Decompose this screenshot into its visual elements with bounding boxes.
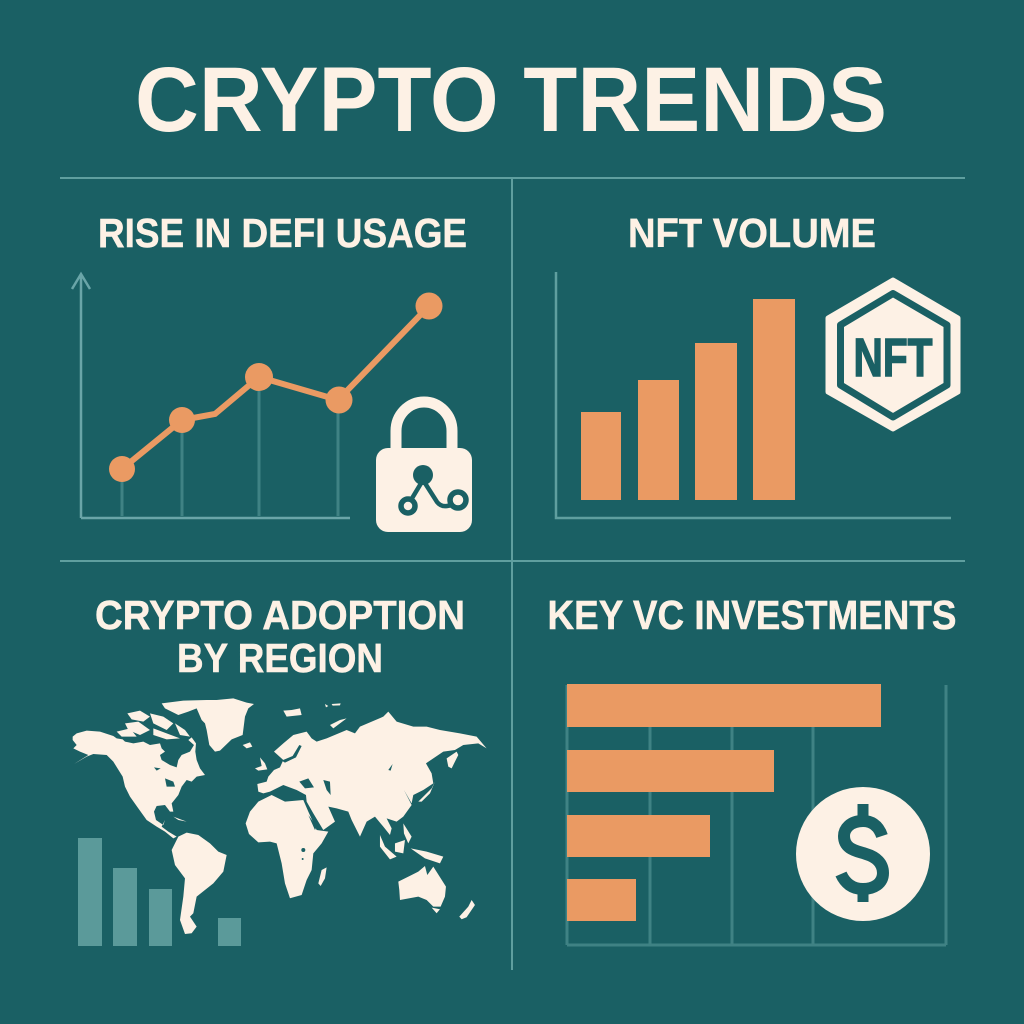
- arctic islands: [117, 711, 190, 739]
- panel: VC investments: [548, 592, 956, 945]
- Eurasia: [257, 712, 487, 837]
- horizontal bar chart: [567, 684, 946, 945]
- Africa: [246, 795, 328, 898]
- title: CRYPTO TRENDS: [135, 49, 887, 151]
- small bar chart: [78, 838, 241, 946]
- heading: NFT volume: NFT VOLUME: [628, 210, 876, 256]
- inland seas and lakes: [154, 745, 393, 860]
- heading: adoption by region: CRYPTO ADOPTION: [95, 592, 465, 638]
- panel: adoption by region: [73, 592, 487, 946]
- bar chart: [556, 272, 951, 518]
- icon: NFT hexagon: [828, 280, 958, 429]
- heading: DeFi usage: RISE IN DEFI USAGE: [98, 210, 467, 256]
- icon: blockchain padlock: [376, 402, 472, 532]
- panel: NFT volume: [556, 210, 958, 518]
- line chart: [72, 274, 442, 518]
- heading: VC investments: KEY VC INVESTMENTS: [548, 592, 956, 638]
- panel: DeFi usage: [72, 210, 472, 532]
- icon: NFT hexagon: NFT: [854, 328, 933, 388]
- Australia: [398, 866, 446, 907]
- heading: adoption by region: BY REGION: [177, 635, 383, 681]
- South America: [172, 833, 227, 934]
- Greenland: [162, 698, 254, 752]
- British Isles: [255, 757, 267, 771]
- world map: [73, 698, 487, 934]
- icon: dollar coin: [796, 787, 930, 921]
- islands: [173, 718, 458, 863]
